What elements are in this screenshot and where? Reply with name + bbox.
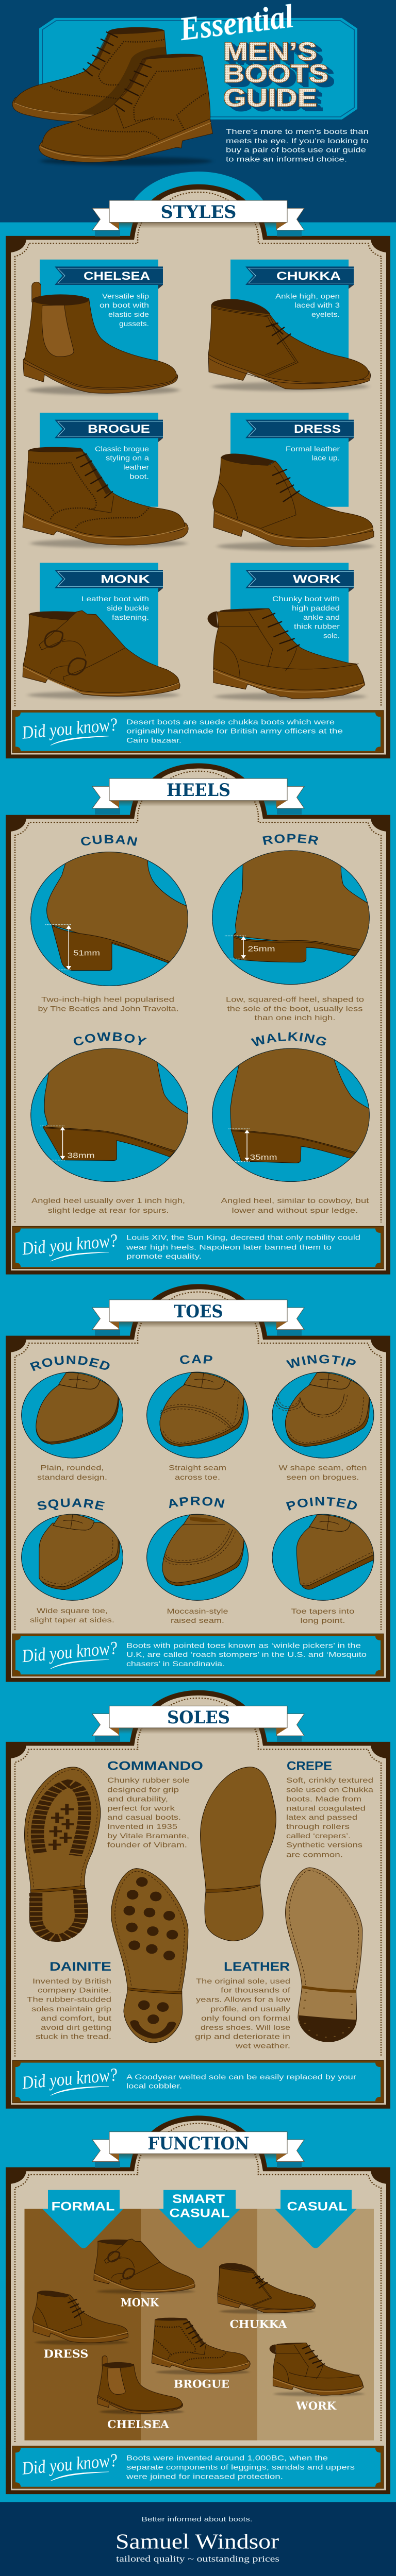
text: leather: wet weather. — [235, 2042, 290, 2050]
text: crepe: natural coagulated — [286, 1804, 366, 1812]
icon: crepe sole — [201, 1767, 276, 1941]
header background — [0, 0, 396, 223]
intro text: There’s more to men’s boots than — [226, 128, 369, 136]
label: work: WORK — [295, 2400, 337, 2413]
description: apron: raised seam. — [171, 1617, 224, 1625]
intro text — [226, 128, 369, 163]
text: dainite: company Dainite. — [38, 1987, 111, 1994]
card: work — [208, 563, 366, 700]
heading: cuban: CUBAN — [81, 835, 137, 846]
panel: styles — [6, 184, 390, 758]
measurement: 38mm: 38mm — [67, 1152, 94, 1160]
description: high padded — [292, 604, 340, 613]
section heading: styles — [92, 200, 304, 236]
text: dainite — [27, 1959, 112, 2041]
banner: WORK — [293, 573, 341, 586]
section heading: soles: SOLES — [167, 1707, 230, 1727]
icon: work boot — [208, 608, 366, 700]
text: leather: LEATHER — [224, 1959, 290, 1974]
description: cuban: by The Beatles and John Travolta. — [38, 1005, 179, 1013]
icon: square toe — [22, 1514, 123, 1600]
description: square: Wide square toe, — [37, 1607, 108, 1615]
section heading: function: FUNCTION — [147, 2133, 250, 2154]
banner: BROGUE — [88, 423, 150, 436]
card background — [230, 563, 349, 666]
text: dainite: DAINITE — [50, 1959, 111, 1974]
banner — [245, 420, 354, 442]
heading: walking: WALKING — [251, 1032, 326, 1046]
text: dainite: stuck in the tread. — [36, 2033, 111, 2041]
card background — [40, 260, 158, 369]
card: chukka — [208, 260, 371, 391]
brand name: Samuel Windsor — [116, 2530, 279, 2553]
text: dainite: Invented by British — [32, 1977, 111, 1985]
text: crepe: sole used on Chukka — [286, 1786, 374, 1794]
icon: cap toe — [147, 1372, 249, 1458]
arrow: smart casual: SMART — [172, 2192, 225, 2206]
description: cowboy: Angled heel usually over 1 inch high, — [31, 1197, 185, 1205]
description: leather — [123, 464, 149, 471]
description: lace up. — [311, 454, 340, 462]
icon: dress boot small — [32, 2291, 128, 2345]
header plaque — [39, 18, 357, 120]
banner — [55, 266, 163, 289]
panel: toes — [6, 1284, 390, 1682]
card: brogue — [23, 413, 188, 548]
callout: did you know toes: U.K, are called ‘roach stompers’ in the U.S. and ‘Mosquito — [126, 1651, 367, 1659]
description — [272, 595, 340, 640]
description: on boot with — [100, 301, 149, 310]
text: leather: only found on formal — [201, 2014, 290, 2023]
text: leather: dress shoes. Will lose — [201, 2024, 290, 2032]
tagline: Better informed about boots. — [141, 2515, 253, 2523]
description: gussets. — [119, 320, 149, 328]
label: brogue: BROGUE — [174, 2378, 229, 2391]
callout: did you know function: separate components of leggings, sandals and uppers — [126, 2464, 355, 2471]
description: walking: lower and without spur ledge. — [232, 1207, 358, 1215]
section heading: soles — [92, 1706, 304, 1742]
measurement: 51mm: 51mm — [73, 949, 100, 957]
icon: brogue boot — [23, 447, 188, 548]
description: roper: Low, squared-off heel, shaped to — [226, 996, 364, 1004]
callout: did you know soles: local cobbler. — [126, 2082, 182, 2090]
chart: cowboy heel — [30, 1048, 188, 1182]
banner — [245, 570, 354, 592]
description: apron: Moccasin-style — [167, 1607, 228, 1616]
description: Classic brogue — [95, 445, 149, 453]
description: Chunky boot with — [272, 595, 340, 603]
description: roper — [226, 996, 364, 1022]
heading: roper: ROPER — [262, 834, 318, 845]
icon: apron toe — [147, 1514, 249, 1600]
footer text — [116, 2515, 279, 2564]
footer background — [0, 2502, 396, 2576]
text: commando: and durability, — [107, 1795, 168, 1803]
callout: did you know function: Boots were invented around 1,000BC, when the — [126, 2454, 328, 2462]
label: dress: DRESS — [43, 2348, 88, 2361]
icon: monk boot small — [94, 2239, 195, 2294]
description: cowboy: slight ledge at rear for spurs. — [47, 1207, 169, 1215]
section heading: toes — [92, 1300, 304, 1336]
icon: monk boot — [23, 611, 180, 699]
panel: heels — [6, 763, 390, 1275]
callout: did you know function: were joined for increased protection. — [126, 2473, 283, 2481]
description — [81, 595, 149, 622]
callout: did you know toes: Did you know? — [20, 1638, 119, 1667]
text: commando: by Vitale Bramante, — [107, 1832, 189, 1840]
icon: dainite sole — [111, 1869, 188, 2043]
banner: CHUKKA — [276, 270, 341, 282]
description: laced with 3 — [294, 301, 340, 310]
description: walking: Angled heel, similar to cowboy, but — [221, 1197, 369, 1205]
description: square: slight taper at sides. — [30, 1616, 114, 1624]
description — [286, 445, 340, 462]
text: commando: designed for grip — [107, 1786, 179, 1794]
text: commando: perfect for work — [107, 1804, 175, 1812]
card background — [230, 260, 349, 369]
description: cap: Straight seam — [169, 1464, 226, 1472]
label: monk: MONK — [121, 2296, 159, 2309]
callout: did you know styles: originally handmade for British army officers at the — [126, 727, 343, 735]
callout: did you know toes: Boots with pointed toes known as ‘winkle pickers’ in the — [126, 1641, 361, 1650]
label: chelsea: CHELSEA — [107, 2418, 170, 2431]
description: apron — [167, 1607, 228, 1625]
callout: did you know toes: chasers’ in Scandinavia. — [126, 1660, 225, 1668]
text: crepe: are common. — [286, 1851, 343, 1859]
arrow: casual: CASUAL — [287, 2199, 348, 2213]
text: dainite: soles maintain grip — [31, 2005, 111, 2013]
arrow: formal — [42, 2190, 123, 2248]
panel: soles — [6, 1690, 390, 2109]
description: elastic side — [108, 311, 149, 319]
icon: wingtip toe — [272, 1372, 374, 1458]
title word: BOOTS: BOOTS — [223, 60, 328, 88]
title word: MEN'S: MEN’S — [223, 37, 317, 65]
text: leather: profile, and usually — [210, 2005, 290, 2013]
description: pointed: long point. — [300, 1617, 345, 1625]
description: fastening. — [112, 614, 149, 622]
description: square — [30, 1607, 114, 1624]
text: dainite: The rubber-studded — [27, 1996, 111, 2004]
description: cap: across toe. — [175, 1473, 220, 1482]
text: crepe: called ‘crepers’. — [286, 1832, 351, 1840]
description: pointed — [291, 1607, 355, 1625]
callout: did you know function: Did you know? — [20, 2450, 119, 2479]
intro text: to make an informed choice. — [226, 156, 347, 163]
description: sole. — [323, 632, 340, 640]
arrow: casual — [275, 2190, 357, 2248]
brand strapline: tailored quality ~ outstanding prices — [116, 2554, 279, 2564]
text: crepe — [286, 1758, 374, 1859]
description: rounded: standard design. — [37, 1473, 107, 1482]
description: cuban: Two-inch-high heel popularised — [41, 996, 174, 1004]
heading: apron: APRON — [169, 1497, 225, 1509]
description: boot. — [129, 472, 149, 481]
chart: cuban heel — [30, 852, 188, 986]
text: commando: and casual boots. — [107, 1814, 181, 1822]
heading: cap: CAP — [180, 1355, 212, 1364]
callout: did you know styles — [12, 710, 384, 753]
callout: did you know styles: Desert boots are suede chukka boots which were — [126, 718, 335, 726]
callout: did you know styles: Did you know? — [20, 714, 119, 743]
section heading: styles: STYLES — [160, 201, 236, 222]
intro text: buy a pair of boots use our guide — [226, 146, 366, 154]
text: dainite: and comfort, but — [41, 2014, 112, 2023]
text: crepe: latex and passed — [286, 1814, 357, 1822]
text: crepe: Synthetic versions — [286, 1841, 362, 1849]
text: commando — [107, 1758, 203, 1849]
banner — [55, 570, 163, 592]
card background — [40, 563, 158, 666]
chart: function columns — [25, 2209, 374, 2441]
callout: did you know heels: wear high heels. Napoleon later banned them to — [126, 1243, 332, 1251]
panel: function — [6, 2115, 390, 2494]
description — [275, 292, 340, 319]
text: crepe: Soft, crinkly textured — [286, 1776, 373, 1785]
description: pointed: Toe tapers into — [291, 1607, 355, 1616]
arrow: formal: FORMAL — [52, 2199, 115, 2213]
icon: chelsea boot — [23, 282, 179, 395]
callout: did you know styles: Cairo bazaar. — [126, 737, 182, 744]
description: rounded: Plain, rounded, — [40, 1464, 104, 1472]
icon: brogue boot small — [152, 2318, 250, 2375]
icon: pointed toe — [272, 1514, 374, 1600]
callout: did you know heels: Louis XIV, the Sun King, decreed that only nobility could — [126, 1234, 360, 1242]
text: leather — [195, 1959, 291, 2050]
heading: wingtip: WINGTIP — [286, 1355, 356, 1368]
chart: roper heel — [212, 850, 370, 985]
icon: dress boot — [213, 454, 374, 551]
description: eyelets. — [311, 311, 340, 319]
icon: work boot small — [270, 2343, 365, 2396]
description: cap — [169, 1464, 226, 1482]
icon: commando sole — [25, 1767, 101, 1941]
description: Formal leather — [286, 445, 340, 453]
description: Versatile slip — [102, 292, 149, 300]
text: crepe: CREPE — [287, 1758, 332, 1773]
callout: did you know heels: promote equality. — [126, 1252, 202, 1261]
description — [100, 292, 149, 328]
banner: DRESS — [294, 423, 341, 436]
arrow: smart casual — [159, 2190, 240, 2248]
callout: did you know soles — [12, 2060, 384, 2103]
heading: square: SQUARE — [37, 1498, 105, 1511]
card background — [230, 413, 349, 507]
heading: pointed: POINTED — [286, 1497, 357, 1511]
text: dainite: avoid dirt getting — [41, 2024, 111, 2032]
heading: cowboy: COWBOY — [73, 1032, 147, 1046]
description: cuban — [38, 996, 179, 1013]
card: dress — [213, 413, 374, 551]
section heading: function — [92, 2132, 304, 2167]
description: side buckle — [107, 604, 149, 613]
card: monk — [23, 563, 180, 699]
text: leather: grip and deteriorate in — [195, 2033, 290, 2041]
description: thick rubber — [294, 623, 340, 631]
callout: did you know soles: A Goodyear welted sole can be easily replaced by your — [126, 2073, 356, 2081]
icon: pair of brown boots — [12, 27, 212, 165]
callout: did you know soles: Did you know? — [20, 2064, 119, 2093]
title word: GUIDE: GUIDE — [223, 83, 317, 112]
description: Leather boot with — [81, 595, 149, 603]
section heading: heels — [92, 778, 304, 815]
description: roper: the sole of the boot, usually less — [227, 1005, 363, 1013]
callout: did you know heels — [12, 1226, 384, 1269]
text: leather: for thousands of — [221, 1987, 291, 1994]
description: walking — [221, 1197, 369, 1215]
chart: walking heel — [212, 1048, 370, 1182]
card background — [40, 413, 158, 507]
callout: did you know toes — [12, 1634, 384, 1676]
text: commando: COMMANDO — [107, 1758, 203, 1773]
description: rounded — [37, 1464, 107, 1482]
text: commando: founder of Vibram. — [107, 1841, 187, 1849]
measurement: 25mm: 25mm — [248, 945, 275, 953]
banner — [55, 420, 163, 442]
callout: did you know function — [12, 2446, 384, 2488]
description: ankle and — [303, 614, 340, 622]
icon: rounded toe — [22, 1372, 123, 1458]
text: crepe: boots. Made from — [286, 1795, 361, 1803]
arrow: smart casual: CASUAL — [169, 2206, 230, 2220]
card: chelsea — [23, 260, 179, 395]
text: commando: Invented in 1935 — [107, 1823, 177, 1831]
text: crepe: through rollers — [286, 1823, 350, 1831]
heading: rounded: ROUNDED — [30, 1355, 109, 1371]
icon: chukka boot small — [218, 2263, 316, 2314]
description: wingtip — [278, 1464, 367, 1482]
text: commando: Chunky rubber sole — [107, 1776, 190, 1785]
banner: CHELSEA — [84, 270, 150, 282]
callout: did you know heels: Did you know? — [20, 1230, 119, 1259]
label: chukka: CHUKKA — [229, 2318, 287, 2331]
description: roper: than one inch high. — [255, 1014, 335, 1022]
description: cowboy — [31, 1197, 185, 1215]
teal arch behind styles heading — [126, 172, 271, 275]
section heading: heels: HEELS — [167, 779, 230, 800]
section heading: toes: TOES — [174, 1301, 223, 1321]
description — [95, 445, 150, 481]
text: leather: years. Allows for a low — [196, 1996, 291, 2004]
description: wingtip: seen on brogues. — [286, 1473, 359, 1482]
banner: MONK — [101, 573, 151, 586]
icon: leather sole — [285, 1868, 362, 2042]
icon: chukka boot — [208, 299, 371, 391]
intro text: meets the eye. If you’re looking to — [226, 137, 369, 145]
title — [176, 0, 328, 112]
banner — [245, 266, 354, 289]
description: wingtip: W shape seam, often — [278, 1464, 367, 1472]
description: Ankle high, open — [275, 292, 340, 300]
description: styling on a — [106, 454, 150, 462]
text: leather: The original sole, used — [196, 1977, 290, 1985]
measurement: 35mm: 35mm — [250, 1154, 277, 1162]
icon: chelsea boot small — [97, 2355, 184, 2414]
